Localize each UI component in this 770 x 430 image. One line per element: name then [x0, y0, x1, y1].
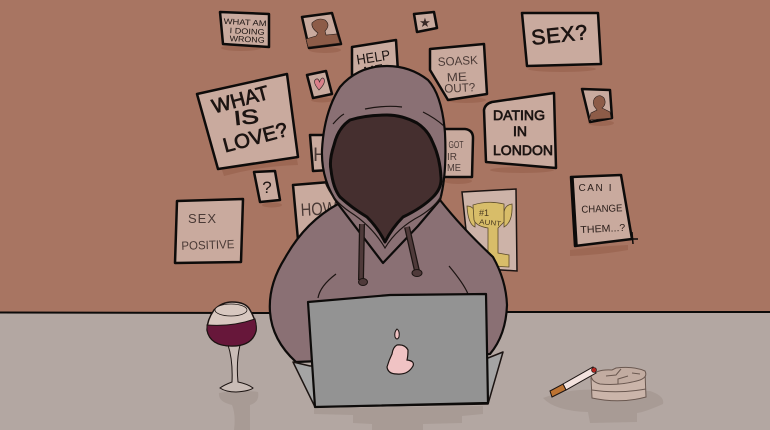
bowl [207, 302, 256, 346]
wall background [0, 0, 770, 313]
note: what is love: LOVE? [221, 119, 290, 157]
note: partly hidden H [310, 135, 330, 171]
note: dating in london: DATING [493, 107, 545, 123]
laptop lid [308, 294, 488, 407]
note: can I change them: CHANGE [581, 203, 623, 216]
note: question mark [254, 171, 282, 208]
note: star [414, 12, 437, 32]
glass shadow [219, 391, 258, 430]
note: so ask me out: OUT? [444, 80, 476, 96]
ashtray body [591, 370, 646, 401]
note: what am I doing wrong: I DOING [229, 26, 265, 37]
note: sex positive: POSITIVE [181, 237, 235, 253]
hood fold lines [333, 106, 444, 126]
note: sex? [522, 13, 601, 72]
note: so ask me out: ME [446, 69, 467, 85]
note: heart [307, 71, 333, 102]
note: star: ★ [419, 15, 431, 30]
note: trophy #1 aunt [462, 189, 517, 271]
wine [207, 319, 256, 346]
note: what am I doing wrong: WHAT AM [223, 17, 267, 28]
note: what am I doing wrong: WRONG [229, 34, 265, 45]
ashtray top [591, 367, 646, 384]
cigarette [563, 367, 596, 390]
note: got their name [440, 129, 473, 184]
table surface [0, 312, 770, 430]
table shadow [543, 390, 663, 423]
note: got their name: ME [447, 163, 461, 174]
note: trophy #1 aunt: AUNT [479, 219, 502, 228]
note: portrait photo [302, 13, 341, 53]
note: dating in london [484, 93, 556, 173]
note: partly hidden H: H [313, 145, 327, 166]
note: sex positive [175, 199, 243, 263]
arm creases [318, 266, 468, 298]
note: small silhouette photo [582, 89, 614, 126]
laptop [293, 294, 503, 430]
wine glass [207, 302, 258, 430]
note: question mark: ? [262, 178, 272, 197]
note: what is love: IS [233, 106, 260, 130]
note: what is love: WHAT [210, 82, 271, 118]
note: can I change them: CAN I [578, 183, 612, 194]
stem and foot [220, 345, 253, 392]
left drawstring [361, 224, 362, 280]
apple-style logo [387, 329, 413, 374]
note: what is love [197, 74, 298, 176]
note: sex positive: SEX [188, 211, 216, 226]
note: got their name: IR [447, 152, 457, 163]
note: sex?: SEX? [530, 21, 588, 50]
right drawstring [407, 227, 417, 271]
note: dating in london: IN [513, 123, 527, 139]
face void [330, 115, 441, 242]
note: can I change them: THEM...? [580, 223, 626, 236]
hoodie body [270, 200, 507, 362]
note: can I change them [570, 175, 638, 256]
note: trophy #1 aunt: #1 [479, 208, 489, 218]
note: help me [352, 40, 398, 82]
hood [322, 66, 445, 263]
note: how: HOW [300, 198, 337, 220]
note: help me: HELP [355, 47, 391, 68]
note: what am I doing wrong [220, 12, 269, 51]
hooded figure [270, 66, 507, 362]
laptop base [293, 352, 503, 407]
note: how [293, 182, 345, 240]
ashtray and cigarette [543, 367, 663, 423]
note: got their name: GOT [448, 140, 464, 151]
hood rim [325, 182, 441, 248]
laptop shadow [314, 406, 483, 430]
note: help me: ME [363, 63, 384, 78]
note: so ask me out: SOASK [437, 53, 478, 69]
note: dating in london: LONDON [493, 142, 553, 158]
note: so ask me out [430, 44, 487, 103]
